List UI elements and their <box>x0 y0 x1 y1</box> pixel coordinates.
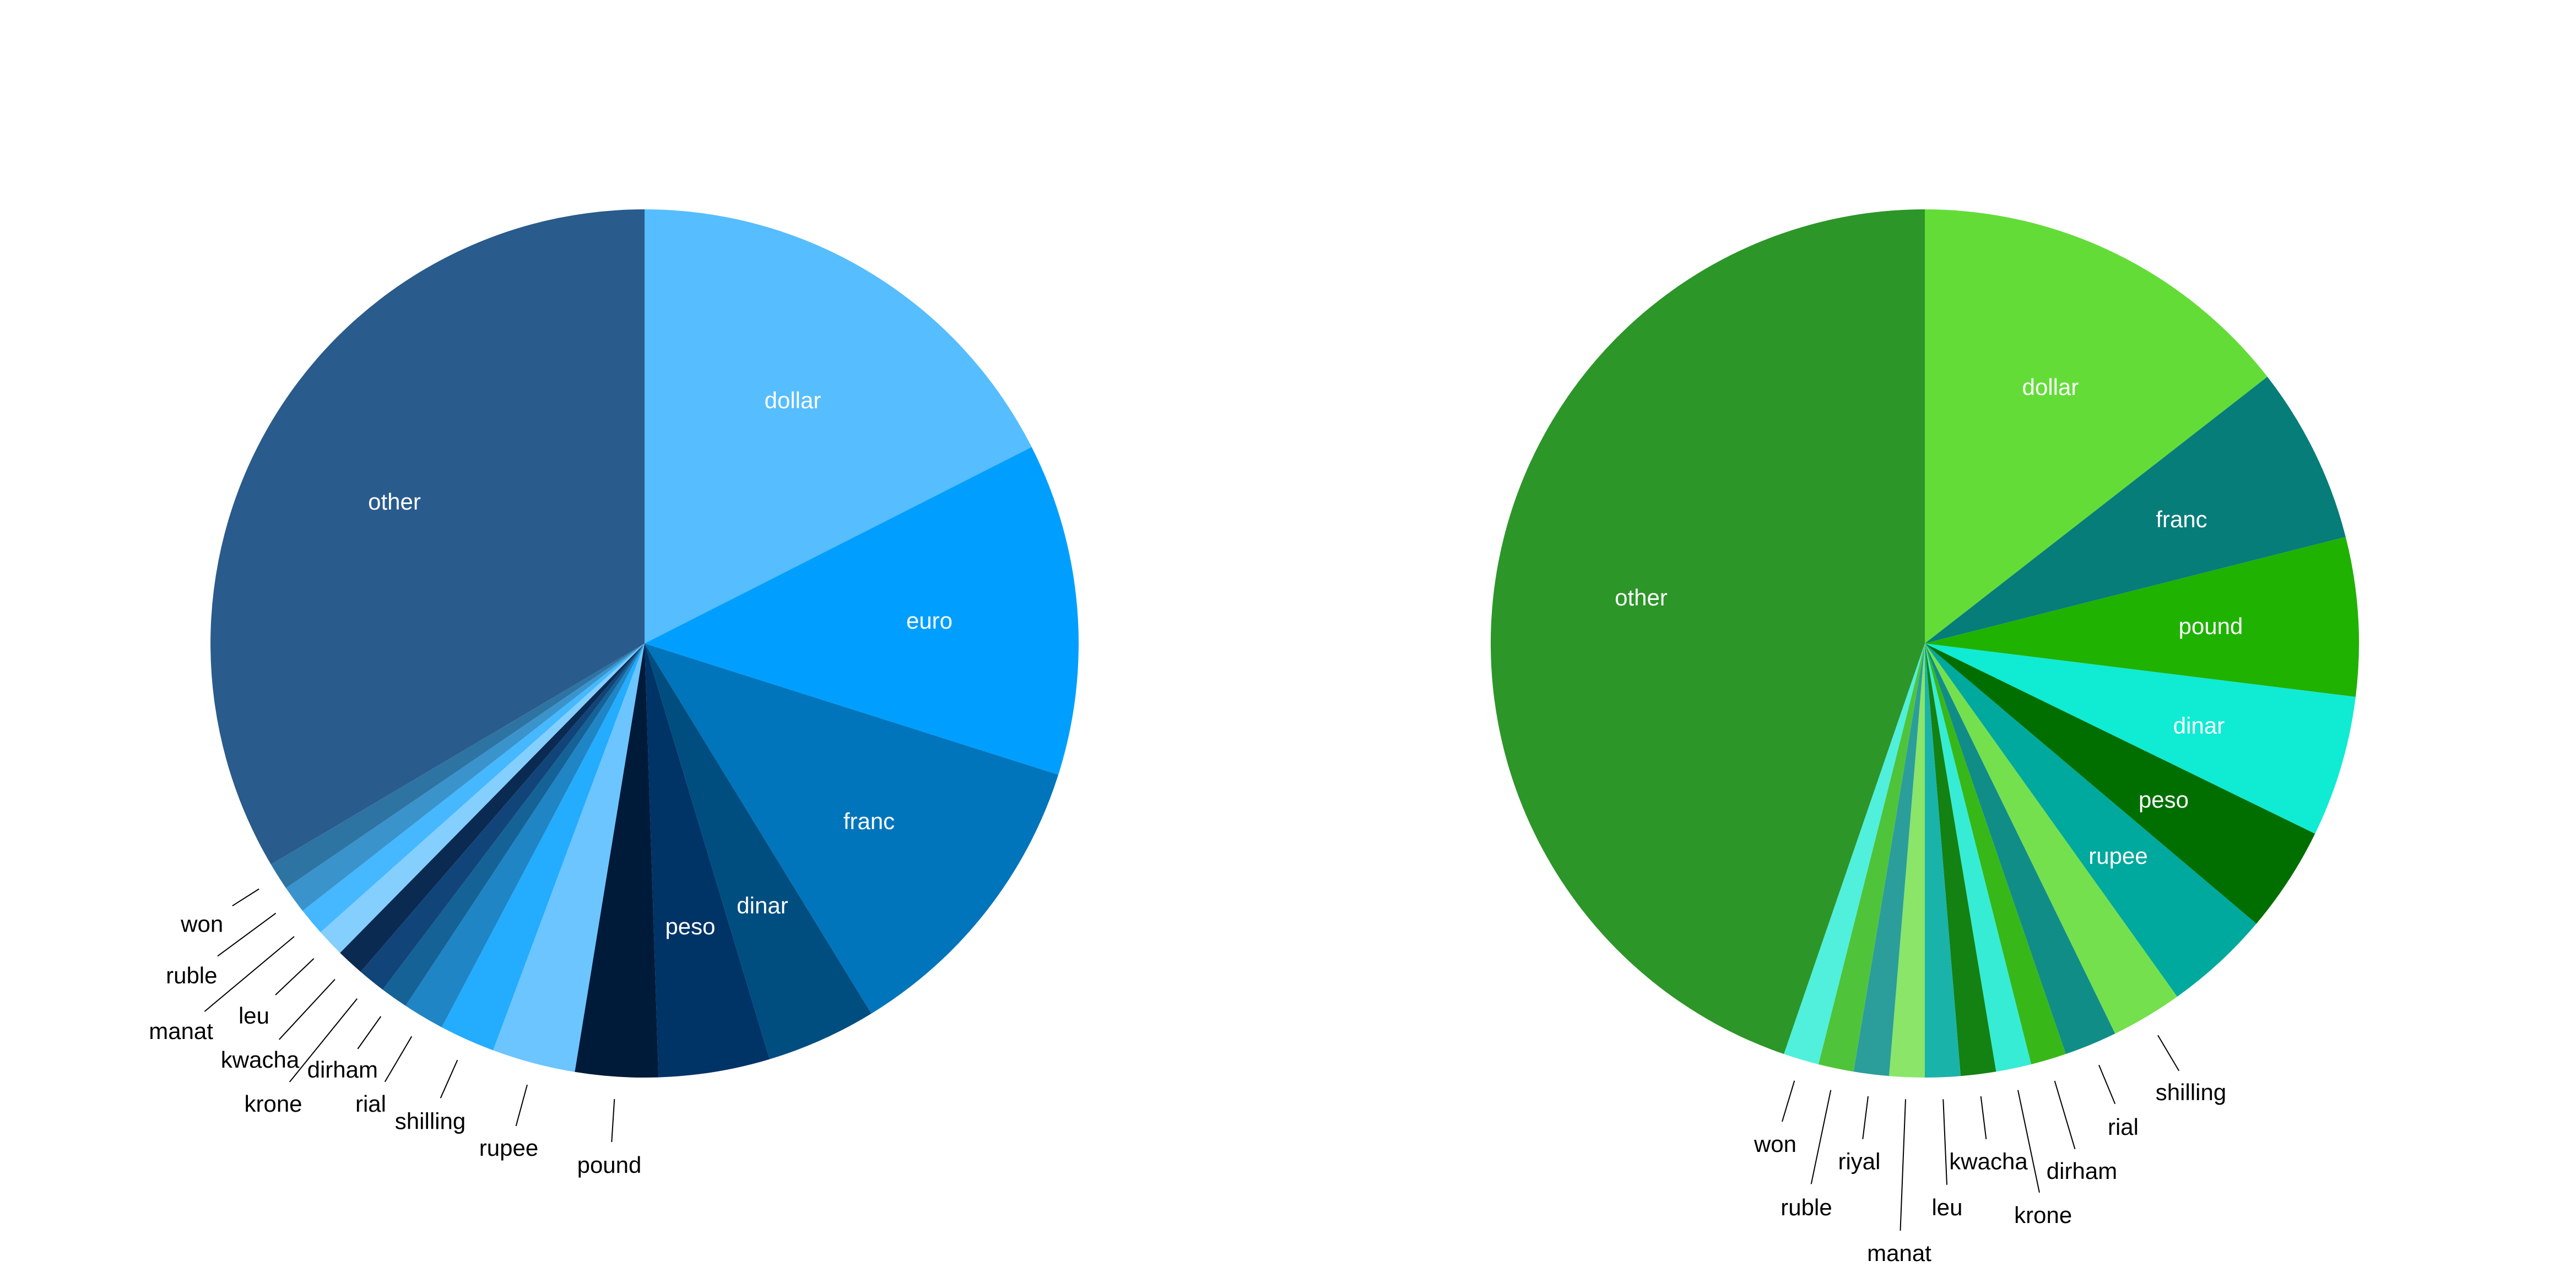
callout: ruble <box>166 913 276 988</box>
slice: peso <box>645 643 770 1078</box>
slice: pound <box>1925 537 2359 697</box>
callout: rupee <box>479 1085 538 1161</box>
callout: dirham: dirham <box>2047 1158 2117 1184</box>
slice: rial <box>1925 643 2115 1054</box>
callout: ruble: ruble <box>1781 1194 1832 1220</box>
callout: rial: rial <box>2108 1114 2139 1140</box>
slice: euro <box>645 447 1079 775</box>
slice label: dollar: dollar <box>2022 374 2079 400</box>
slice: krone <box>361 643 645 989</box>
slice label: peso: peso <box>2139 787 2189 813</box>
slice label: dollar: dollar <box>765 387 821 413</box>
callout: leu <box>239 959 314 1029</box>
callout: manat <box>149 937 294 1044</box>
callout: krone <box>2014 1090 2072 1228</box>
callout: shilling: shilling <box>395 1108 466 1134</box>
slice: dirham <box>1925 643 2066 1064</box>
slice: riyal <box>1854 643 1925 1076</box>
callout: riyal <box>1838 1096 1881 1174</box>
callout: krone <box>244 999 357 1117</box>
callout: rial: rial <box>355 1091 386 1117</box>
chart: blue currency pie <box>149 209 1079 1178</box>
slice: shilling <box>442 643 645 1050</box>
slice: dirham <box>383 643 645 1006</box>
slice: other <box>210 209 645 864</box>
callout: shilling <box>395 1060 466 1134</box>
slice: manat <box>302 643 645 932</box>
slice label: franc: franc <box>843 808 895 834</box>
callout: manat: manat <box>1867 1240 1931 1266</box>
callout: kwacha: kwacha <box>221 1047 300 1073</box>
slice: dinar <box>645 643 872 1059</box>
slice: other <box>1491 209 1925 1054</box>
callout: ruble <box>1781 1090 1832 1220</box>
slice label: peso: peso <box>665 913 716 939</box>
callout: shilling <box>2156 1035 2226 1105</box>
callout: rial <box>2099 1065 2139 1140</box>
callout: ruble: ruble <box>166 962 218 988</box>
callout: kwacha: kwacha <box>1949 1148 2028 1174</box>
slice label: other: other <box>368 489 421 515</box>
slice: rupee <box>493 643 645 1072</box>
chart: green currency pie <box>1491 209 2359 1266</box>
slice label: rupee: rupee <box>2088 843 2148 869</box>
callout: krone: krone <box>2014 1202 2072 1228</box>
callout: krone: krone <box>244 1091 302 1117</box>
callout: shilling: shilling <box>2156 1079 2226 1105</box>
callout: dirham <box>307 1016 381 1083</box>
callout: won: won <box>180 911 223 937</box>
callout: won: won <box>1754 1131 1796 1157</box>
slice label: dinar: dinar <box>2173 713 2225 739</box>
callout: rupee: rupee <box>479 1135 538 1161</box>
callout: manat <box>1867 1099 1931 1266</box>
callout: dirham <box>2047 1081 2117 1184</box>
slice: won <box>271 643 645 888</box>
slice: leu <box>321 643 645 953</box>
slice: ruble <box>1819 643 1925 1071</box>
slice label: euro: euro <box>906 608 953 634</box>
callout: leu <box>1931 1099 1963 1220</box>
callout: won <box>1754 1081 1796 1157</box>
pie: green slices <box>1491 209 2359 1078</box>
callout: manat: manat <box>149 1018 213 1044</box>
slice: manat <box>1889 643 1925 1078</box>
slice: franc <box>645 643 1058 1014</box>
slice: rupee <box>1925 643 2256 997</box>
callout: kwacha <box>1949 1096 2028 1174</box>
pie: blue slices <box>210 209 1079 1078</box>
slice label: other: other <box>1615 585 1668 610</box>
callout: kwacha <box>221 979 335 1073</box>
slice: kwacha <box>1925 643 1996 1076</box>
slice: rial <box>405 643 645 1027</box>
slice: shilling <box>1925 643 2177 1033</box>
slice: pound <box>575 643 658 1078</box>
slice label: pound: pound <box>2179 613 2243 639</box>
slice: dollar <box>645 209 1032 643</box>
slice: dinar <box>1925 643 2356 834</box>
callout: riyal: riyal <box>1838 1148 1881 1174</box>
slice: kwacha <box>340 643 645 972</box>
slice: leu <box>1925 643 1961 1078</box>
callout: dirham: dirham <box>307 1057 378 1083</box>
slice: franc <box>1925 377 2346 643</box>
slice: peso <box>1925 643 2315 924</box>
callout: pound <box>577 1099 641 1178</box>
slice: krone <box>1925 643 2031 1071</box>
callout: leu: leu <box>239 1003 269 1029</box>
callout: leu: leu <box>1931 1194 1963 1220</box>
callout: won <box>180 889 259 937</box>
callout: pound: pound <box>577 1152 641 1178</box>
slice label: dinar: dinar <box>737 892 788 918</box>
slice: dollar <box>1925 209 2267 643</box>
slice label: franc: franc <box>2156 506 2207 532</box>
slice: won <box>1784 643 1925 1064</box>
callout: rial <box>355 1036 412 1117</box>
slice: ruble <box>286 643 645 911</box>
